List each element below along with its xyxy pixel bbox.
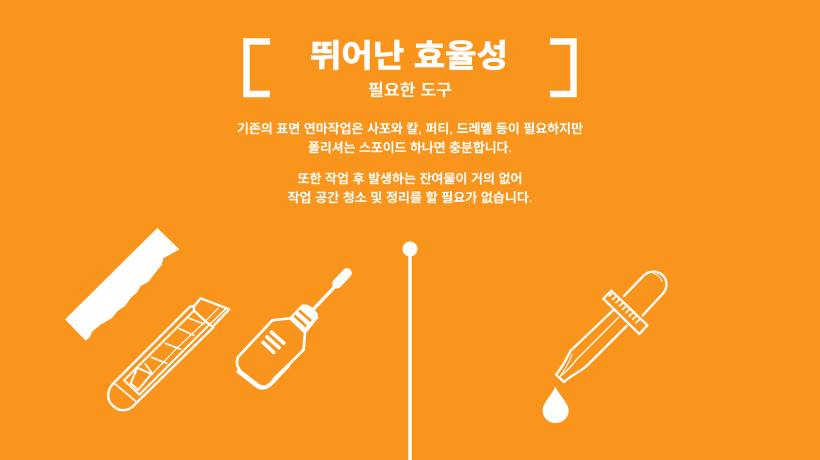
knife body [108, 306, 213, 410]
water drop [543, 387, 569, 423]
tube collar [290, 306, 317, 332]
dropper bulb [624, 272, 666, 315]
left bracket [246, 42, 270, 94]
icon: putty tube [237, 273, 347, 388]
knife slider [131, 368, 151, 390]
icon: sandpaper [65, 228, 179, 341]
description paragraph 1 [237, 122, 584, 155]
description paragraph 2: 또한 작업 후 발생하는 잔여물이 거의 없어 [298, 172, 522, 186]
dropper glass tube [556, 311, 627, 382]
knife end cap line [115, 384, 137, 403]
subtitle: 필요한 도구 [368, 82, 452, 100]
knife inner rails [124, 311, 207, 395]
knife blade [195, 298, 229, 326]
description paragraph 2: 작업 공간 청소 및 정리를 할 필요가 없습니다. [288, 190, 532, 205]
icon: dropper [543, 272, 666, 423]
description paragraph 1: 기존의 표면 연마작업은 사포와 칼, 퍼티, 드레멜 등이 필요하지만 [237, 122, 584, 136]
tube nozzle tip [337, 273, 347, 284]
knife blade segments [145, 318, 204, 374]
title: 뛰어난 효율성 [310, 38, 508, 74]
icon: utility knife [108, 298, 229, 410]
description paragraph 2 [288, 172, 532, 205]
tube label stripes [263, 332, 284, 352]
right bracket [550, 42, 574, 94]
dropper collar [603, 291, 647, 334]
tube bottom crimp [238, 366, 288, 388]
description paragraph 1: 폴리셔는 스포이드 하나면 충분합니다. [308, 140, 512, 155]
central divider with dot [402, 242, 418, 460]
tube body [237, 318, 305, 387]
